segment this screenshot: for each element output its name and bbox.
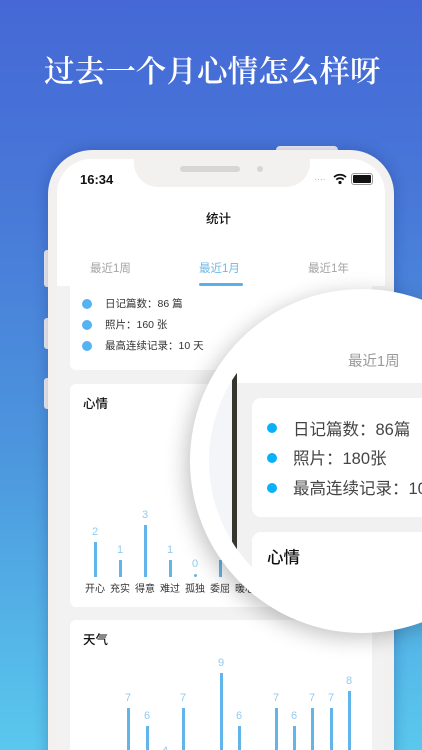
magnified tab: 最近1周 bbox=[348, 354, 400, 370]
tab underline bbox=[199, 283, 243, 286]
mood bar chart: 开心 bbox=[85, 584, 105, 595]
weather bar chart: 6 bbox=[144, 710, 150, 722]
magnifier circle bbox=[190, 289, 422, 633]
weather bar chart: 7 bbox=[125, 692, 131, 704]
stat: diaries: 日记篇数：86 篇 bbox=[105, 298, 183, 310]
panel: stats bbox=[70, 286, 372, 370]
magnified content bbox=[209, 308, 422, 614]
status icons: ···· bbox=[314, 174, 325, 185]
stat: streak: 最高连续记录：10 天 bbox=[105, 340, 204, 352]
mood bar chart: 1 bbox=[167, 544, 173, 556]
weather bar chart: 8 bbox=[346, 675, 352, 687]
weather bar chart: 6 bbox=[291, 710, 297, 722]
weather bar chart bbox=[125, 657, 352, 750]
panel: mood bbox=[70, 384, 372, 607]
tab: week: 最近1周 bbox=[90, 263, 131, 275]
panel: weather bbox=[70, 620, 372, 750]
mood bar chart bbox=[85, 509, 255, 595]
weather bar chart: 7 bbox=[328, 692, 334, 704]
notch bbox=[134, 157, 310, 187]
magnified stats card bbox=[252, 398, 422, 517]
weather bar chart: 7 bbox=[309, 692, 315, 704]
tab: year: 最近1年 bbox=[308, 263, 349, 275]
stat: photos: 照片：160 张 bbox=[105, 319, 167, 331]
mood bar chart: 委屈 bbox=[210, 584, 230, 595]
weather bar chart: 7 bbox=[273, 692, 279, 704]
tab: month: 最近1月 bbox=[199, 263, 240, 275]
phone screen bbox=[57, 159, 385, 750]
phone side buttons bbox=[44, 146, 338, 409]
page heading: 统计 bbox=[206, 212, 231, 226]
status time: 16:34 bbox=[80, 172, 113, 187]
mood bar chart: 难过 bbox=[160, 584, 180, 595]
mood bar chart: 1 bbox=[217, 544, 223, 556]
mood bar chart: 1 bbox=[117, 544, 123, 556]
weather bar chart: 6 bbox=[236, 710, 242, 722]
magnified stat: photos: 照片：180张 bbox=[293, 450, 387, 468]
magnified mood heading: 心情 bbox=[267, 549, 300, 567]
mood bar chart: 3 bbox=[142, 509, 148, 521]
magnified stat: diaries: 日记篇数：86篇 bbox=[293, 421, 410, 439]
mood bar chart: 0 bbox=[192, 558, 198, 570]
title: 过去一个月心情怎么样呀 bbox=[44, 55, 381, 89]
status icons bbox=[314, 173, 373, 185]
magnified mood card bbox=[252, 532, 422, 652]
mood bar chart: 2 bbox=[92, 526, 98, 538]
mood heading: 心情 bbox=[83, 397, 108, 411]
weather bar chart: 9 bbox=[218, 657, 224, 669]
phone bbox=[41, 145, 401, 750]
mood bar chart: 得意 bbox=[135, 584, 155, 595]
mood bar chart: 暖心 bbox=[235, 584, 255, 595]
mood bar chart: 充实 bbox=[110, 584, 130, 595]
magnified background bbox=[236, 383, 422, 614]
mood bar chart: 孤独 bbox=[185, 584, 205, 595]
magnified phone edge bbox=[232, 308, 236, 614]
weather heading: 天气 bbox=[83, 633, 108, 647]
screen header bbox=[57, 159, 385, 286]
magnified pale side bbox=[209, 308, 232, 614]
phone frame bbox=[48, 150, 394, 750]
weather bar chart: 7 bbox=[180, 692, 186, 704]
